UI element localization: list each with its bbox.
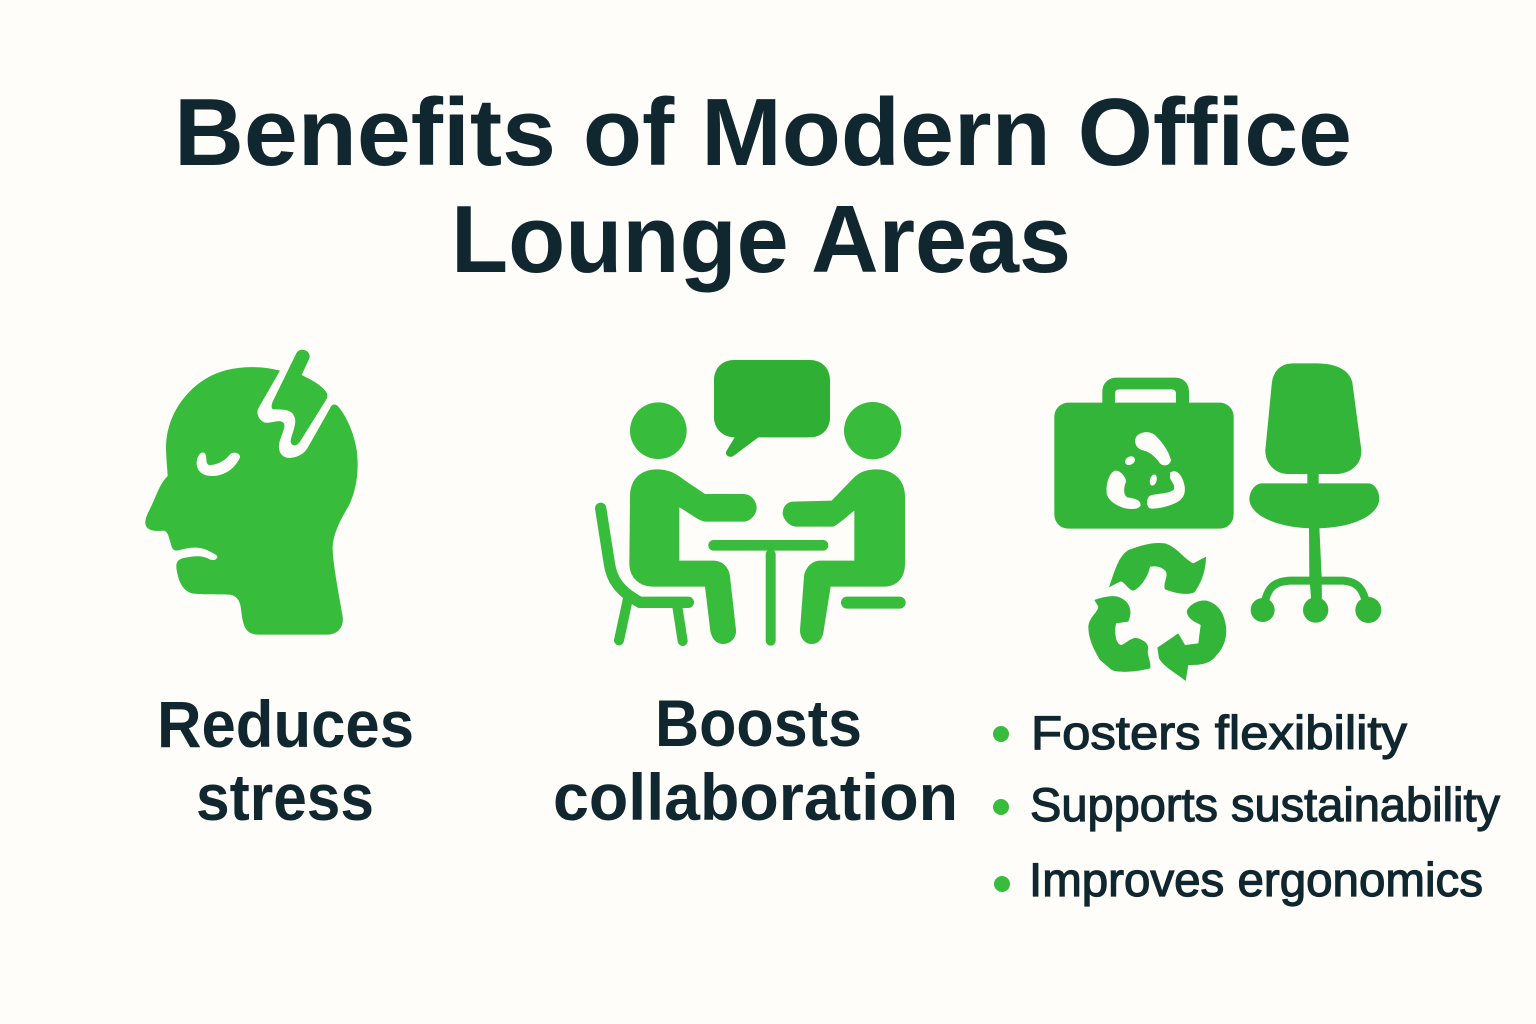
title: Lounge Areas — [451, 186, 1071, 293]
left chair — [601, 508, 688, 641]
left person — [629, 469, 757, 644]
right head — [844, 402, 901, 459]
icon: briefcase — [1054, 378, 1234, 529]
icon: recycling arrows — [1088, 543, 1226, 681]
right seat — [841, 597, 906, 609]
icon group: briefcase, chair, recycling — [1054, 363, 1381, 681]
closed eye — [197, 453, 240, 476]
left head — [630, 402, 687, 459]
label: boosts collaboration — [553, 686, 958, 834]
right person — [783, 469, 905, 644]
bullet: improves ergonomics: Improves ergonomics — [1029, 853, 1483, 906]
bullet: supports sustainability: Supports sustainability — [1030, 778, 1500, 831]
icon: head with lightning bolt — [145, 350, 358, 635]
title — [174, 79, 1352, 293]
head silhouette — [145, 367, 358, 635]
title: Benefits of Modern Office — [174, 79, 1352, 186]
icon: office chair — [1249, 363, 1381, 623]
speech bubble — [714, 360, 830, 457]
lightning bolt — [272, 350, 327, 445]
bullet list — [993, 706, 1500, 906]
label: reduces stress: stress — [196, 760, 374, 834]
panel: boosts collaboration — [553, 360, 958, 834]
panel: reduces stress — [145, 350, 414, 834]
icon: two people talking at a table — [601, 360, 906, 646]
bullet: fosters flexibility: Fosters flexibility — [1031, 706, 1408, 759]
label: reduces stress — [157, 687, 414, 834]
label: boosts collaboration: Boosts — [655, 686, 862, 760]
label: boosts collaboration: collaboration — [553, 760, 958, 834]
label: reduces stress: Reduces — [157, 687, 414, 761]
panel: other benefits — [993, 363, 1500, 906]
table — [708, 540, 828, 646]
